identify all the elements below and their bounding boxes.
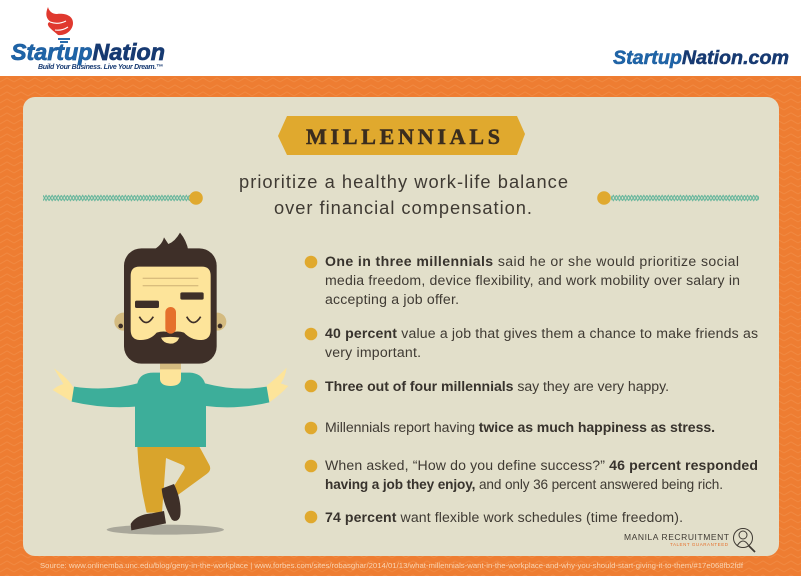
header: white band <box>0 0 801 76</box>
eyebrows <box>135 301 159 308</box>
divider left <box>43 191 203 205</box>
credit: Manila Recruitment: MANILA RECRUITMENT <box>624 532 729 542</box>
heading banner: MILLENNIALS <box>278 116 525 155</box>
bullet 6: 74 percent want flexible work schedules (time freedom). <box>325 509 683 525</box>
bullet 5 <box>305 457 758 492</box>
bullet 1: media freedom, device flexibility, and work mobility over salary in <box>325 272 740 288</box>
subtitle: over financial compensation. <box>274 197 532 218</box>
head <box>124 248 217 364</box>
bullet 5: When asked, “How do you define success?” 46 percent responded <box>325 457 758 473</box>
source line: Source: www.onlinemba.unc.edu/blog/geny-in-the-workplace | www.forbes.com/sites/robasghar/2014/01/13/what-millennials-want-in-the-workplace-and-why-you-should-start-giving-it-to-them/#17e068fb2fdf <box>40 561 744 570</box>
hands <box>53 368 74 402</box>
bullet 2: 40 percent value a job that gives them a chance to make friends as <box>325 325 758 341</box>
logo wordmark: StartupNation <box>11 39 165 65</box>
credit: Manila Recruitment: TALENT GUARANTEED <box>670 542 729 547</box>
smile <box>161 337 179 344</box>
logo tagline: Build Your Business. Live Your Dream.™ <box>38 64 163 71</box>
divider right <box>597 191 759 205</box>
shadow <box>107 525 224 535</box>
subtitle <box>239 171 568 218</box>
neck <box>160 363 181 386</box>
shirt <box>72 373 269 447</box>
ears <box>114 313 132 331</box>
closed eyes <box>139 317 153 322</box>
bullet 1: accepting a job offer. <box>325 291 459 307</box>
bullet 1: One in three millennials said he or she would prioritize social <box>325 253 739 269</box>
face <box>131 267 211 340</box>
credit: Manila Recruitment <box>624 528 755 552</box>
bullet 5: having a job they enjoy, and only 36 percent answered being rich. <box>325 477 723 492</box>
bullet 2: very important. <box>325 344 421 360</box>
bullet list <box>305 253 758 525</box>
nose <box>165 307 176 334</box>
icon: torch flame <box>46 7 73 43</box>
header site name: StartupNation.com <box>613 48 789 69</box>
icon: magnifier <box>734 528 755 552</box>
bullet 1 <box>305 253 740 307</box>
forehead lines <box>143 278 198 279</box>
subtitle: prioritize a healthy work-life balance <box>239 171 568 192</box>
bullet 3: Three out of four millennials say they are very happy. <box>325 378 669 394</box>
trousers <box>137 447 210 513</box>
panel: main content <box>23 97 779 556</box>
bullet 4: Millennials report having twice as much happiness as stress. <box>325 419 715 435</box>
shoes <box>131 511 166 530</box>
heading banner: MILLENNIALS: MILLENNIALS <box>306 124 500 149</box>
hair tuft <box>152 233 188 251</box>
logo: StartupNation <box>11 7 165 71</box>
bullet 2 <box>305 325 758 360</box>
illustration: meditating bearded man <box>53 233 288 535</box>
